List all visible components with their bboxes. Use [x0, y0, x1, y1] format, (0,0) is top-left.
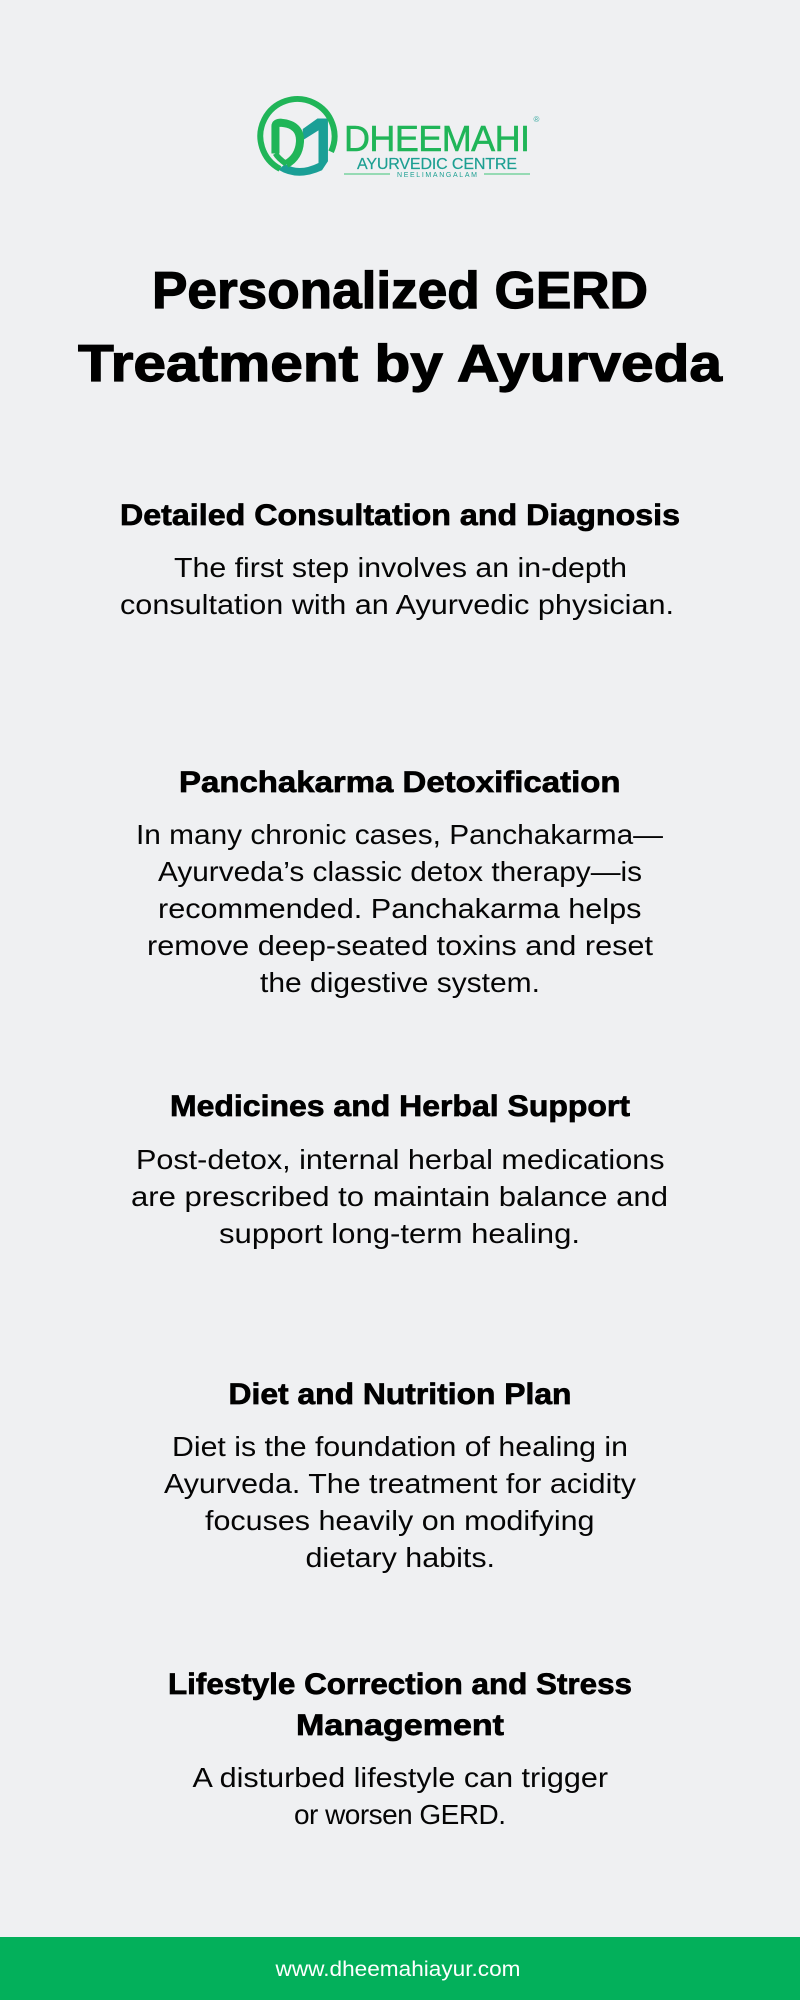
body text — [164, 1431, 636, 1573]
section: Medicines and Herbal Support — [131, 1090, 668, 1249]
body text: Ayurveda. The treatment for acidity — [164, 1468, 636, 1499]
body text: or worsen GERD. — [294, 1799, 506, 1830]
body text — [131, 1144, 668, 1249]
section: Lifestyle Correction and Stress Management — [168, 1668, 632, 1830]
registered mark: ® — [534, 115, 540, 124]
title: Personalized GERD — [152, 262, 648, 320]
logo location: NEELIMANGALAM — [397, 172, 477, 179]
logo subtitle: AYURVEDIC CENTRE — [357, 156, 517, 173]
body text — [120, 552, 674, 620]
body text: Post-detox, internal herbal medications — [136, 1144, 664, 1175]
body text: consultation with an Ayurvedic physician. — [120, 589, 674, 620]
body text: A disturbed lifestyle can trigger — [192, 1762, 608, 1793]
body text: Ayurveda’s classic detox therapy—is — [158, 856, 642, 887]
body text: remove deep-seated toxins and reset — [147, 930, 653, 961]
section: Panchakarma Detoxification — [136, 766, 663, 998]
heading: Management — [296, 1709, 504, 1742]
body text: are prescribed to maintain balance and — [131, 1181, 668, 1212]
logo: Dheemahi Ayurvedic Centre — [260, 99, 540, 179]
body text: In many chronic cases, Panchakarma— — [136, 819, 663, 850]
body text — [136, 819, 663, 998]
body text: recommended. Panchakarma helps — [158, 893, 642, 924]
title — [78, 262, 723, 393]
icon: circular DM monogram — [260, 99, 335, 176]
heading: Diet and Nutrition Plan — [228, 1378, 572, 1411]
heading: Medicines and Herbal Support — [170, 1090, 630, 1123]
website url: www.dheemahiayur.com — [274, 1958, 520, 1981]
footer bar — [0, 1937, 800, 2000]
body text: the digestive system. — [260, 967, 540, 998]
body text: support long-term healing. — [219, 1218, 580, 1249]
title: Treatment by Ayurveda — [78, 335, 723, 393]
heading: Lifestyle Correction and Stress — [168, 1668, 632, 1701]
heading: Panchakarma Detoxification — [179, 766, 620, 799]
body text: focuses heavily on modifying — [205, 1505, 594, 1536]
section: Diet and Nutrition Plan — [164, 1378, 636, 1573]
body text — [192, 1762, 608, 1830]
heading: Detailed Consultation and Diagnosis — [120, 499, 680, 532]
logo wordmark: DHEEMAHI — [344, 118, 530, 159]
body text: dietary habits. — [306, 1542, 495, 1573]
body text: The first step involves an in-depth — [174, 552, 627, 583]
heading — [168, 1668, 632, 1742]
section: Detailed Consultation and Diagnosis — [120, 499, 680, 620]
body text: Diet is the foundation of healing in — [172, 1431, 628, 1462]
